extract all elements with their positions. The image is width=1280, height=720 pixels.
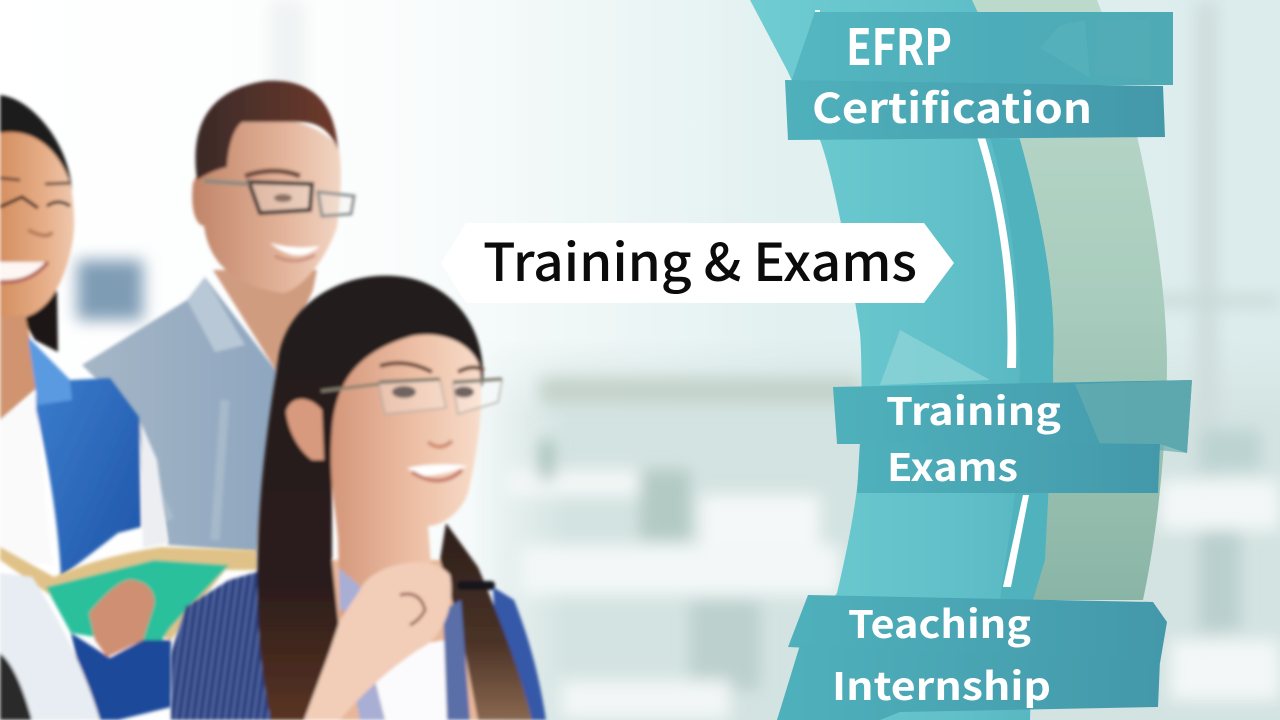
label: Training: Training — [886, 381, 1061, 436]
label: Teaching: Teaching — [848, 594, 1031, 649]
person: woman left — [0, 95, 168, 577]
person: man with glasses, back — [82, 81, 354, 552]
label: Internship: Internship — [832, 656, 1051, 711]
central title pill: Training & Exams — [441, 221, 954, 303]
banner: EFRP Certification — [785, 8, 1173, 140]
heading: EFRP: EFRP — [846, 8, 952, 80]
notebook — [0, 547, 257, 720]
label: Exams: Exams — [887, 437, 1018, 492]
title text: Training & Exams — [483, 221, 917, 296]
heading: Certification: Certification — [812, 75, 1092, 135]
person: woman front — [171, 276, 546, 720]
people photo — [0, 81, 546, 720]
banner: Training Exams — [833, 380, 1192, 493]
banner: Teaching Internship — [777, 594, 1167, 720]
ribbon: central curved teal band — [750, 0, 1167, 720]
